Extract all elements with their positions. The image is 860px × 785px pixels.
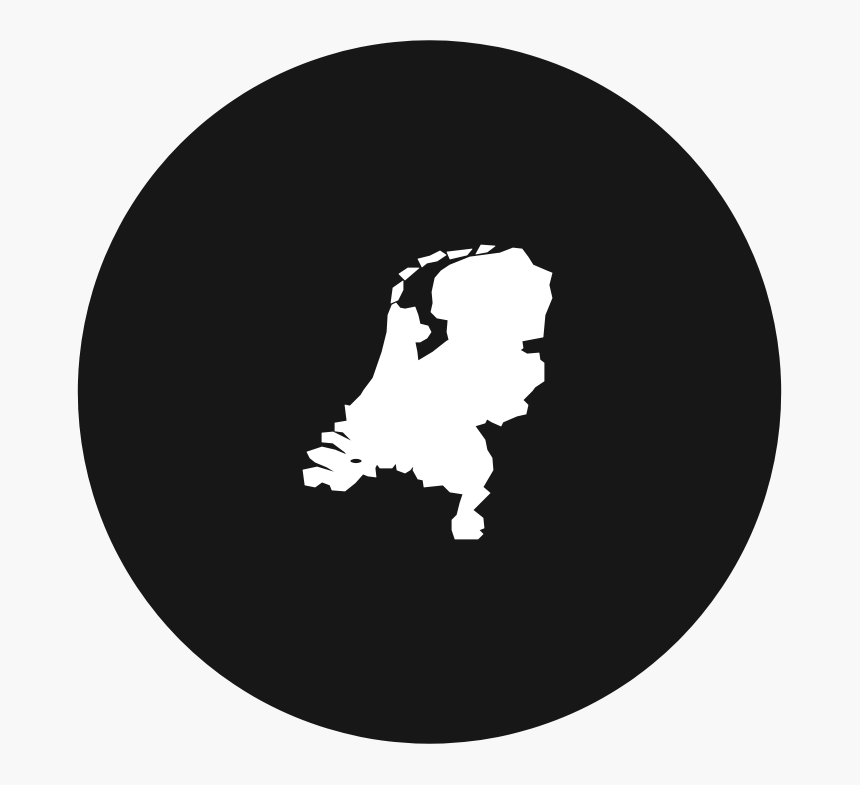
island: Schiermonnikoog <box>476 245 495 254</box>
island: Vlieland <box>399 268 419 280</box>
mainland Netherlands <box>303 248 552 539</box>
icon: Netherlands map <box>303 245 552 539</box>
island: Ameland <box>447 249 472 259</box>
island: Terschelling <box>418 251 446 267</box>
black circle badge <box>78 40 781 744</box>
island: Texel <box>391 281 403 303</box>
